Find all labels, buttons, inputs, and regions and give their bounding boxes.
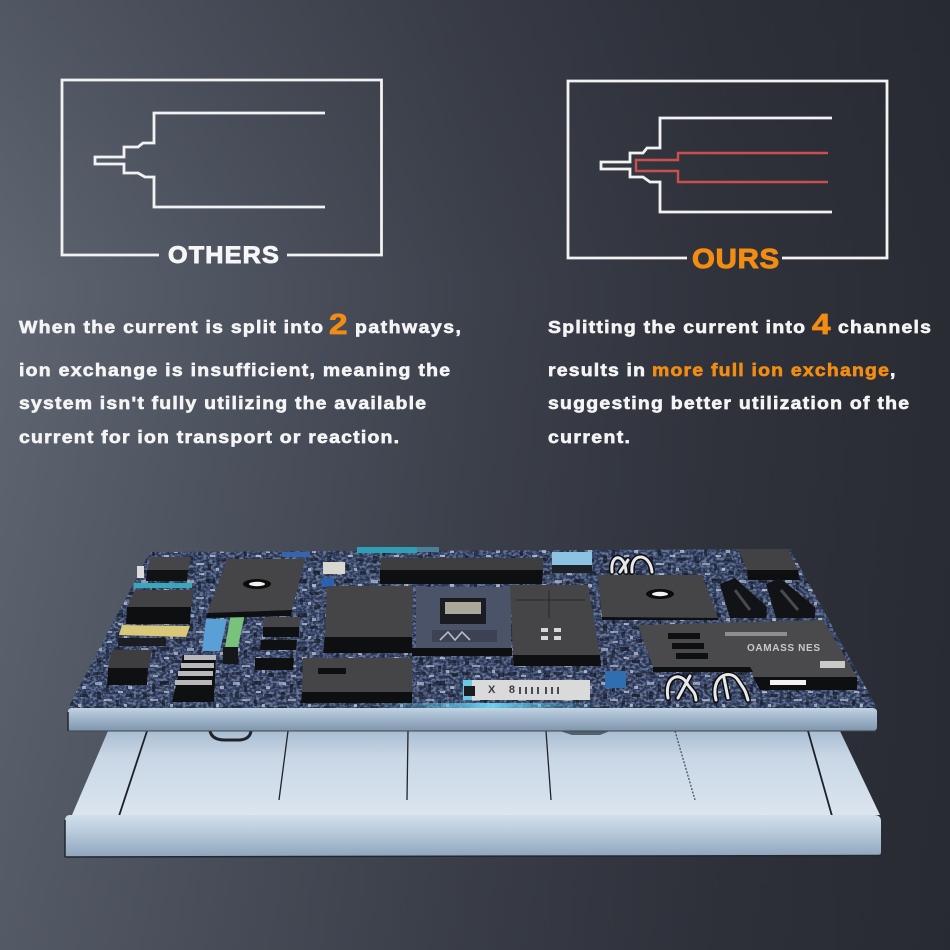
others frame <box>62 80 382 255</box>
plate dividers <box>210 731 695 800</box>
dark pad row under yellow connector <box>118 638 166 646</box>
yellow connector <box>119 625 190 637</box>
ours outer electrode outline <box>601 118 832 212</box>
chip: left module <box>126 590 194 624</box>
processor socket <box>412 587 512 656</box>
diagram: others <box>62 80 382 269</box>
illustration: circuit board <box>60 545 890 731</box>
chip: pads <box>510 585 601 666</box>
text block: ours description: suggesting better utilization of the <box>548 393 909 413</box>
cyan glow strip <box>380 703 600 708</box>
text block: others description: system isn't fully utilizing the available <box>19 393 426 413</box>
top slot connector <box>380 558 543 584</box>
text block: ours description: results in <box>548 360 645 380</box>
chip: top right module <box>738 549 800 580</box>
highlighted number 4: 4 <box>812 308 831 340</box>
board front edge <box>68 708 877 731</box>
text block: others description: ion exchange is insufficient, meaning the <box>19 360 450 380</box>
text block: ours description: channels <box>838 317 931 337</box>
text block: others description: current for ion transport or reaction. <box>19 427 399 447</box>
text block: others description: pathways, <box>355 317 461 337</box>
blue capacitor block <box>605 671 626 688</box>
heat sink stripes <box>172 655 216 702</box>
plate front edge <box>65 815 881 857</box>
chip: lower left module <box>107 650 152 685</box>
highlighted number 2: 2 <box>329 308 348 340</box>
squiggly traces <box>612 557 748 700</box>
text block: ours description <box>548 308 931 447</box>
blue and green connectors <box>202 613 245 664</box>
chip: large labelled module <box>638 620 857 690</box>
black fin connectors <box>720 578 815 618</box>
others label: OTHERS <box>168 243 279 269</box>
white label bar <box>463 680 590 700</box>
plate outline <box>119 731 832 816</box>
others electrode outline <box>95 113 325 207</box>
ours inner red channels <box>636 153 828 182</box>
chip: top left module <box>134 557 192 588</box>
diagram: ours <box>568 81 887 275</box>
white label bar: X 8 <box>488 684 515 696</box>
text block: others description: When the current is split into <box>19 317 323 337</box>
text block: others description <box>19 308 461 447</box>
chip: right heatsink with oval <box>598 575 718 620</box>
small black modules <box>255 617 300 670</box>
illustration: lower battery plate <box>65 731 881 857</box>
chip: center square <box>323 586 413 653</box>
text block: ours description: more full ion exchange <box>652 360 889 380</box>
chip: front low module <box>301 658 412 703</box>
text block: ours description: current. <box>548 427 630 447</box>
top connector strips <box>282 547 592 587</box>
chip: large heatsink with oval <box>206 559 305 618</box>
board base <box>60 545 890 710</box>
text block: ours description: Splitting the current into <box>548 317 805 337</box>
module label text: OAMASS NES <box>747 643 820 654</box>
ours label: OURS <box>692 244 779 275</box>
text block: ours description: , <box>890 360 895 380</box>
ours frame <box>568 81 887 258</box>
